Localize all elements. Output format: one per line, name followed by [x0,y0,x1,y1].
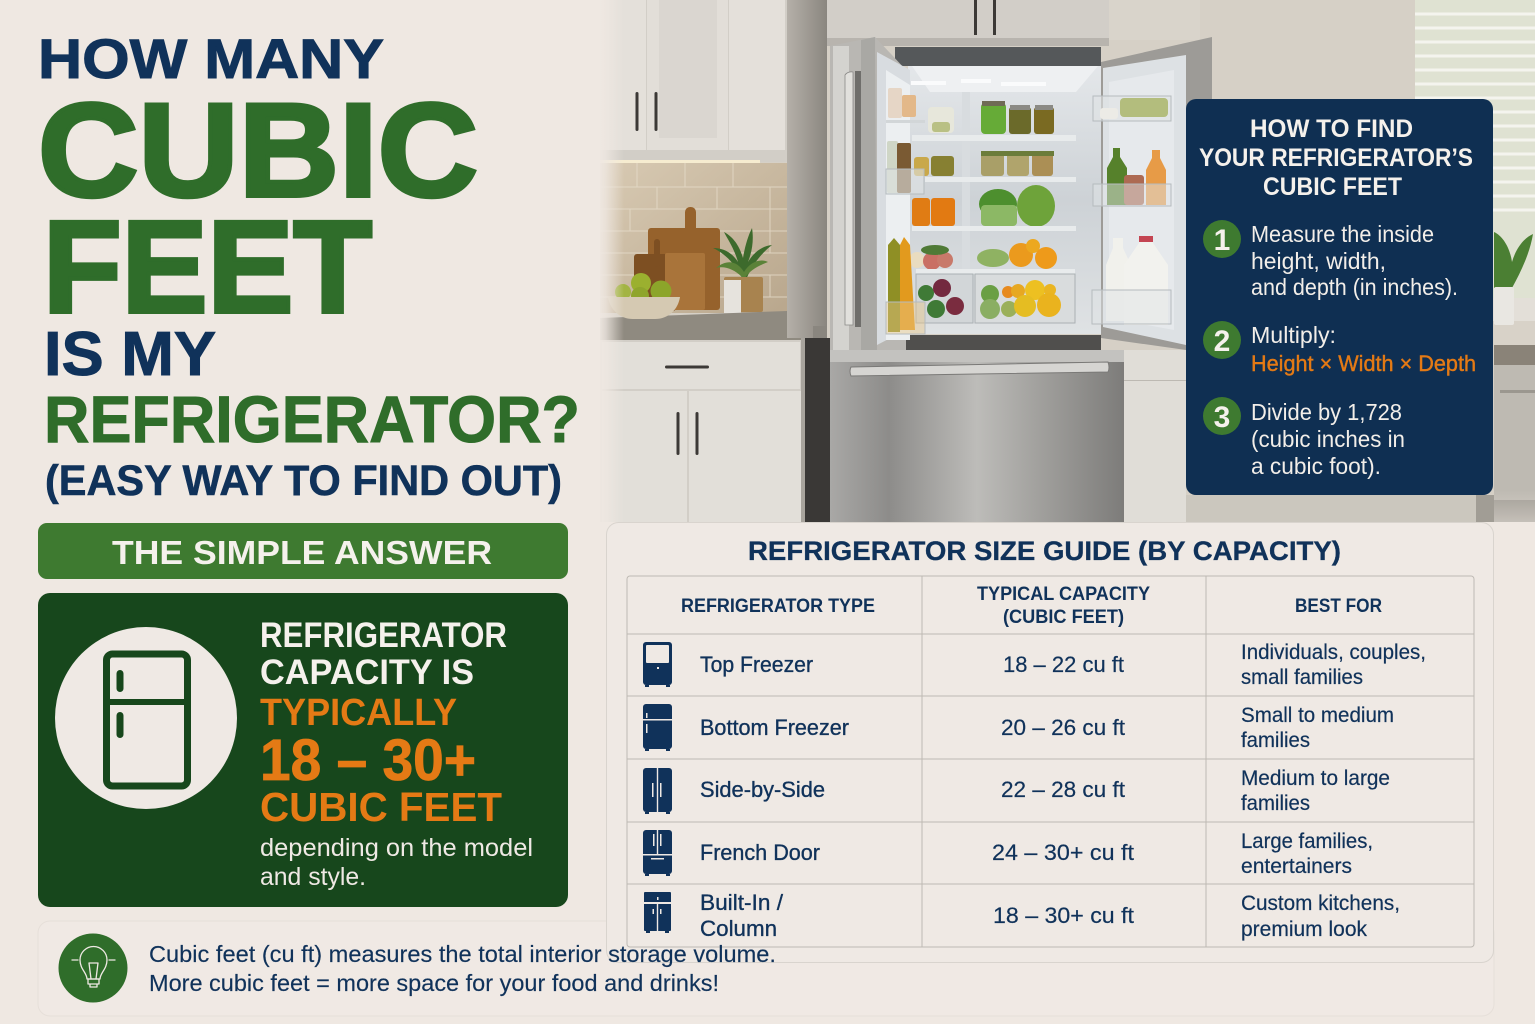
icon: built-in [644,892,671,933]
banner text: THE SIMPLE ANSWER [112,534,492,571]
icon: bottom freezer [643,704,672,751]
photo left fade [598,0,624,522]
answer text [260,616,507,830]
fridge shelves [912,135,1076,274]
row: built-in column: Custom kitchens, [1241,892,1400,915]
step 1: Measure the inside [1251,221,1434,247]
title line: feet: FEET [43,193,372,340]
how-to heading: CUBIC FEET [1263,173,1402,201]
tile backsplash [600,163,787,313]
note callout [58,934,776,1002]
step 3: 3 [1214,401,1230,434]
step 3: a cubic foot). [1251,453,1381,479]
right open door [1092,37,1212,352]
note text: More cubic feet = more space for your food and drinks! [149,970,719,996]
icon: refrigerator in circle [55,627,237,809]
row: side-by-side [643,767,1390,815]
size guide heading: REFRIGERATOR SIZE GUIDE (BY CAPACITY) [748,536,1341,566]
upper cabinets [600,0,1200,163]
lower cabinets [600,340,801,522]
row: bottom freezer: Small to medium [1241,704,1394,727]
row: french door: entertainers [1241,855,1352,878]
note text [149,941,776,996]
how-to heading: HOW TO FIND [1250,115,1413,143]
title [38,27,580,505]
row: top freezer [643,641,1426,689]
step 1: height, width, [1251,248,1386,274]
icon: side-by-side [643,768,672,814]
left door bins [886,88,925,334]
row: french door [643,830,1373,878]
row: built-in column: Column [700,916,777,941]
answer text: 18 – 30+ [260,728,476,793]
left open door [830,37,910,350]
how-to panel [1186,99,1493,495]
how-to heading [1199,115,1473,201]
photo bottom fade [1494,490,1535,560]
step 1: and depth (in inches). [1251,274,1458,300]
row: side-by-side: Medium to large [1241,767,1390,790]
row: top freezer: 18 – 22 cu ft [1003,652,1124,677]
title line: cubic: CUBIC [38,77,478,225]
note text: Cubic feet (cu ft) measures the total interior storage volume. [149,941,776,967]
row: built-in column [644,890,1400,941]
answer text: TYPICALLY [260,692,457,734]
shelf two jars [914,151,1054,176]
countertop [600,311,813,340]
answer text: REFRIGERATOR [260,616,507,655]
icon: french door [643,830,672,876]
lower right cabinet [1124,350,1535,522]
row: built-in column: Built-In / [700,890,784,915]
answer text: CAPACITY IS [260,653,474,692]
icon: light bulb [58,934,128,1002]
step 1 [1203,220,1458,300]
wall and backdrop [600,0,1535,522]
row: bottom freezer [643,704,1394,752]
row: top freezer: small families [1241,666,1363,689]
step 2: 2 [1214,325,1230,358]
cutting boards [634,207,720,311]
row: built-in column: 18 – 30+ cu ft [993,903,1134,928]
row: top freezer: Individuals, couples, [1241,641,1426,664]
size guide table grid [627,576,1474,947]
answer caption: and style. [260,863,366,891]
row: side-by-side: Side-by-Side [700,777,825,802]
table header [681,584,1382,628]
window plant [1494,232,1533,325]
row: side-by-side: 22 – 28 cu ft [1001,777,1125,802]
shelf three food [912,185,1055,227]
step 3 [1203,397,1405,479]
potted plant [713,228,772,313]
step 3: Divide by 1,728 [1251,399,1402,425]
row: french door: Large families, [1241,830,1373,853]
row: side-by-side: families [1241,792,1310,815]
row: french door: 24 – 30+ cu ft [992,840,1134,865]
shelf four food [909,239,1057,270]
title line: how many: HOW MANY [38,27,384,90]
fridge side panel [787,0,830,522]
row: french door: French Door [700,840,820,865]
shelf one jars [928,101,1054,134]
step 2 [1203,321,1476,376]
crisper drawers [916,274,1075,323]
title line: refrigerator: REFRIGERATOR? [44,382,580,456]
title line: easy way: (EASY WAY TO FIND OUT) [45,457,562,505]
answer text: CUBIC FEET [260,784,502,830]
kitchen photo illustration [598,0,1535,560]
step 1: 1 [1214,224,1230,257]
fridge interior [895,47,1101,350]
simple answer banner [38,523,568,579]
how-to heading: YOUR REFRIGERATOR’S [1199,144,1473,172]
table header: REFRIGERATOR TYPE [681,596,875,617]
title line: is my: IS MY [44,320,216,389]
note box background [38,921,1494,1016]
answer caption [260,834,533,891]
row: top freezer: Top Freezer [700,652,813,677]
step 3: (cubic inches in [1251,426,1405,452]
row: bottom freezer: families [1241,729,1310,752]
table header: TYPICAL CAPACITY [977,584,1150,605]
window with blinds [1415,0,1535,500]
answer caption: depending on the model [260,834,533,862]
step 2: Height × Width × Depth [1251,351,1476,376]
row: built-in column: premium look [1241,918,1367,941]
bowl of limes [608,273,680,319]
icon: top freezer [643,642,672,687]
row: bottom freezer: Bottom Freezer [700,715,849,740]
table header: (CUBIC FEET) [1003,607,1124,628]
table header: BEST FOR [1295,596,1382,617]
size guide panel [606,522,1494,962]
step 2: Multiply: [1251,322,1336,348]
row: bottom freezer: 20 – 26 cu ft [1001,715,1125,740]
freezer drawer [830,350,1124,522]
answer panel [38,593,568,907]
